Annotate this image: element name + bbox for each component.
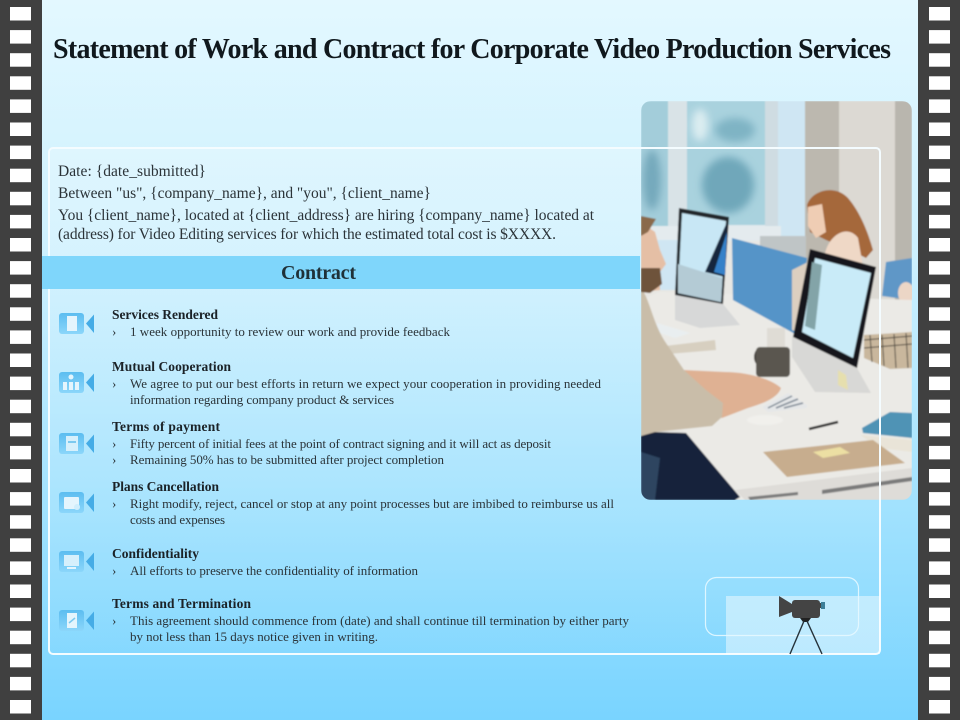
item: mutual cooperation	[59, 359, 602, 407]
item: confidentiality: Confidentiality	[112, 546, 199, 561]
blue notebook	[862, 412, 912, 438]
panel: frame outline	[49, 148, 880, 654]
monitor 1	[675, 208, 740, 328]
icon: video camera on tripod	[779, 596, 825, 654]
item: plans cancellation: Plans Cancellation	[112, 479, 219, 494]
man's forearm and hand	[683, 370, 781, 418]
item: mutual cooperation: information regarding company product & services	[130, 392, 394, 407]
item: plans cancellation	[59, 479, 614, 527]
item: terms of payment: ›	[112, 452, 116, 467]
item: confidentiality: ›	[112, 563, 116, 578]
item: terms and termination: by not less than 15 days notice given in writing.	[130, 629, 378, 644]
hiring statement line 2: (address) for Video Editing services for which the estimated total cost is $XXXX.	[58, 226, 556, 243]
mouse	[747, 415, 783, 425]
pen	[809, 422, 838, 429]
icon: contract camera	[59, 610, 94, 631]
item: plans cancellation: costs and expenses	[130, 512, 225, 527]
keyboard	[762, 393, 807, 412]
mug	[755, 328, 790, 377]
item: terms and termination: Terms and Termination	[112, 596, 251, 611]
item: services rendered: Services Rendered	[112, 307, 218, 322]
film strip: left	[0, 0, 42, 720]
item: mutual cooperation: We agree to put our best efforts in return we expect your cooperation in providing needed	[130, 376, 602, 391]
item: terms of payment	[59, 419, 551, 467]
icon: document camera	[59, 313, 94, 334]
parties line: Between "us", {company_name}, and "you", {client_name}	[58, 185, 431, 202]
item: services rendered: 1 week opportunity to review our work and provide feedback	[130, 324, 450, 339]
monitor 2	[792, 249, 876, 393]
item: mutual cooperation: ›	[112, 376, 116, 391]
man's shirt	[641, 288, 723, 440]
item: terms and termination: ›	[112, 613, 116, 628]
icon: monitor camera	[59, 551, 94, 572]
icon: card camera	[59, 492, 94, 513]
tan folder	[763, 440, 905, 477]
icon: team camera	[59, 372, 94, 393]
date line: Date: {date_submitted}	[58, 163, 206, 180]
contract heading band	[42, 256, 640, 289]
item: terms of payment: ›	[112, 436, 116, 451]
man's face	[641, 216, 666, 293]
item: plans cancellation: Right modify, reject, cancel or stop at any point processes but are imbibed to reimburse us all	[130, 496, 614, 511]
item: confidentiality	[59, 546, 418, 578]
icon: invoice camera	[59, 433, 94, 454]
item: terms of payment: Remaining 50% has to be submitted after project completion	[130, 452, 444, 467]
desks	[870, 298, 912, 304]
contract heading band: Contract	[281, 262, 356, 284]
intro text block	[58, 163, 595, 243]
item: confidentiality: All efforts to preserve the confidentiality of information	[130, 563, 418, 578]
keyboard small	[658, 324, 686, 337]
item: plans cancellation: ›	[112, 496, 116, 511]
rounded outline box	[706, 578, 858, 636]
item: terms of payment: Terms of payment	[112, 419, 220, 434]
item: terms and termination	[59, 596, 630, 644]
trousers	[641, 432, 740, 500]
sticky note	[813, 447, 850, 458]
film strip: right	[918, 0, 960, 720]
photo: office workers at desks	[641, 101, 914, 500]
item: terms of payment: Fifty percent of initial fees at the point of contract signing and it will act as deposit	[130, 436, 551, 451]
item: services rendered	[59, 307, 450, 339]
hiring statement line 1: You {client_name}, located at {client_address} are hiring {company_name} located at	[58, 207, 595, 224]
wire basket	[864, 332, 912, 369]
panel: frame fill	[49, 148, 880, 654]
decorative camera panel	[726, 596, 880, 654]
wall and window	[641, 101, 912, 301]
right chair and arm	[882, 258, 912, 300]
partition	[732, 238, 807, 335]
item: mutual cooperation: Mutual Cooperation	[112, 359, 231, 374]
title: Statement of Work and Contract for Corporate Video Production Services	[53, 34, 891, 65]
woman	[807, 190, 873, 272]
item: services rendered: ›	[112, 324, 116, 339]
item: terms and termination: This agreement should commence from (date) and shall continue till termination by either party	[130, 613, 630, 628]
